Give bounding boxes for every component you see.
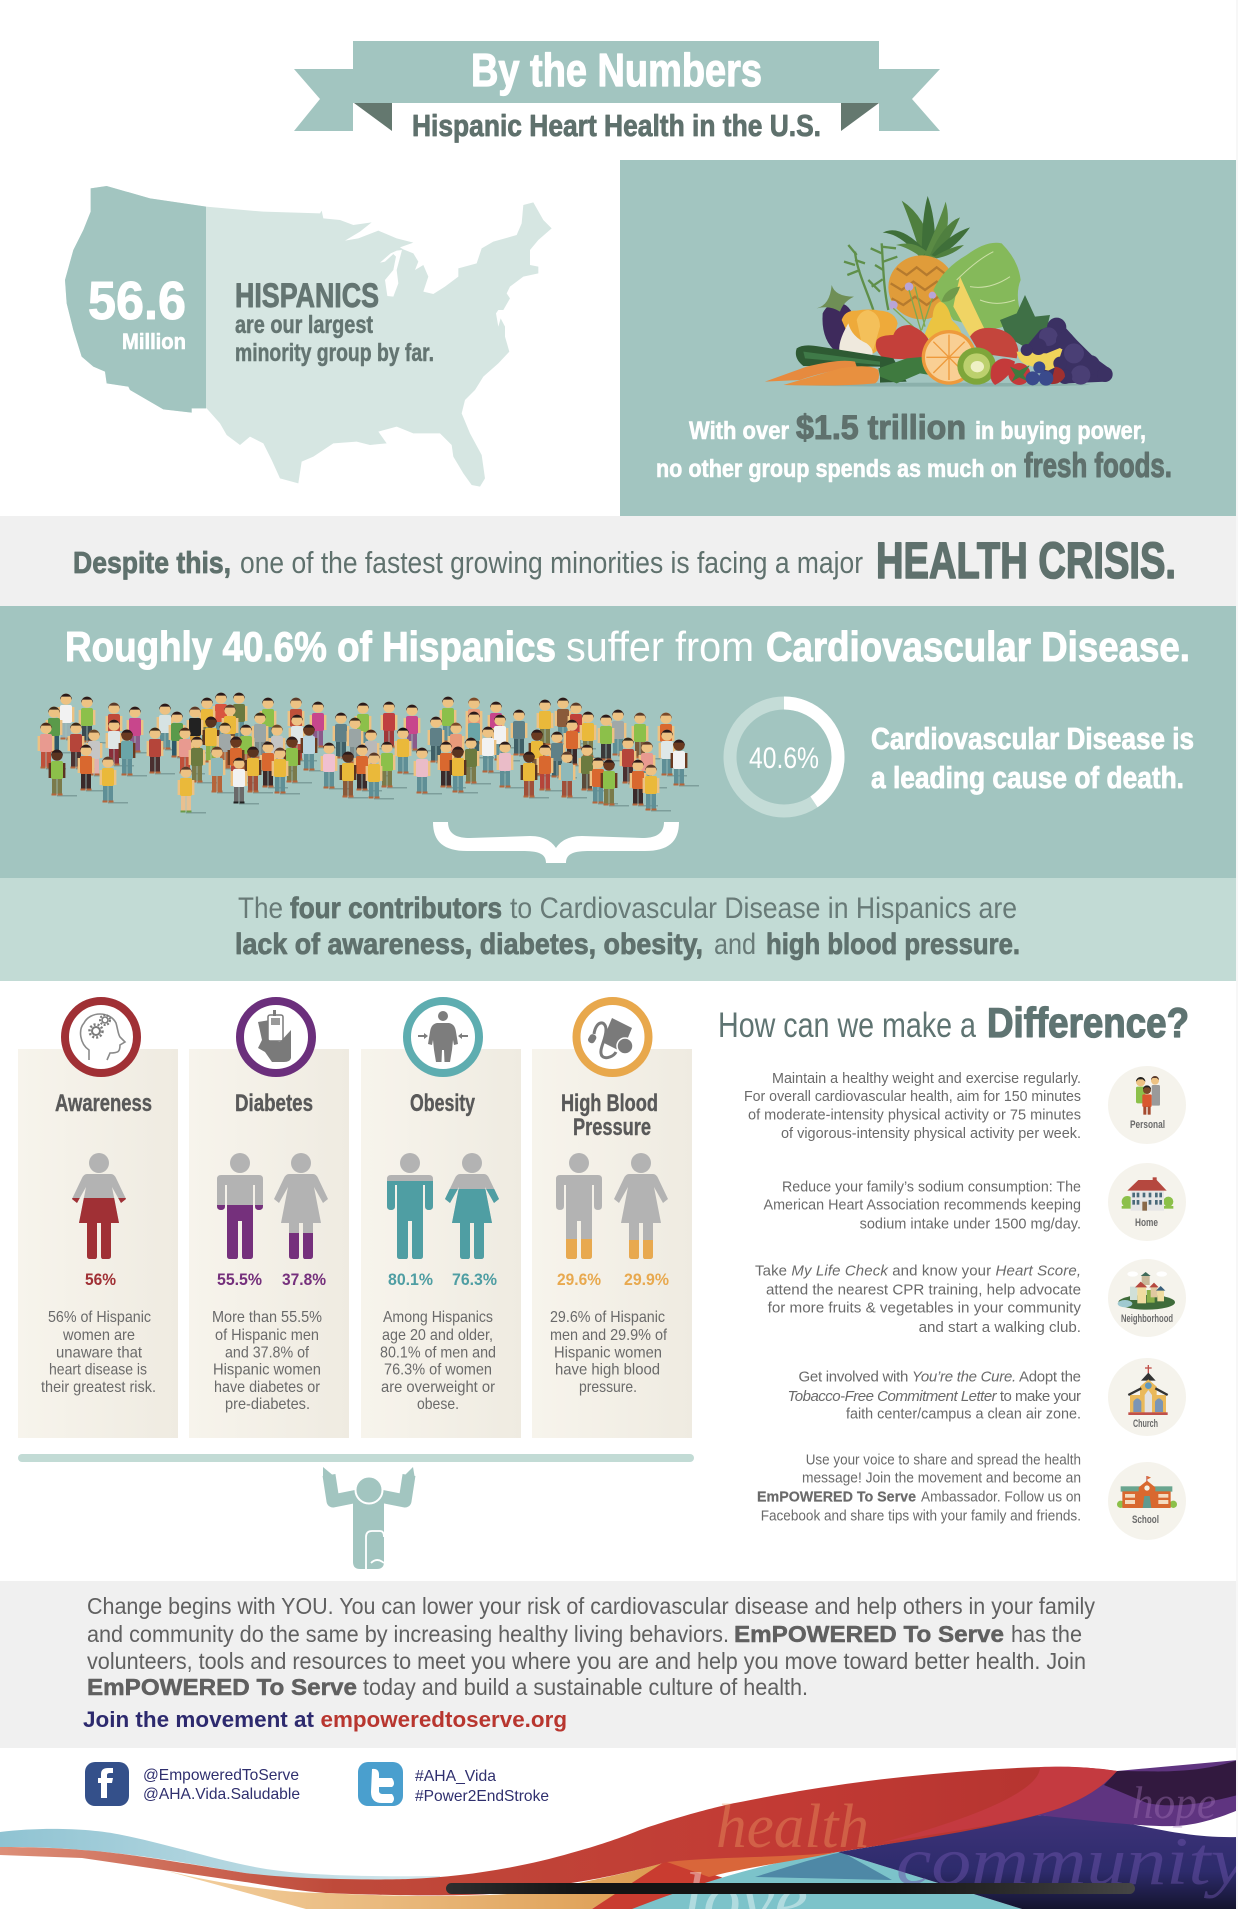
description xyxy=(212,1309,322,1413)
heading: Diabetes xyxy=(235,1090,313,1117)
icon: church xyxy=(1108,1358,1186,1436)
twitter hashtags: #Power2EndStroke xyxy=(415,1788,549,1805)
tip: church: Tobacco-Free Commitment Letter to make your xyxy=(788,1388,1081,1405)
join the movement link xyxy=(83,1707,567,1732)
decorative ribbon with words xyxy=(0,1760,1238,1909)
contributors text: to Cardiovascular Disease in Hispanics are xyxy=(510,892,1017,925)
facebook handles xyxy=(143,1767,300,1803)
health crisis text xyxy=(73,532,1176,589)
icon: home: Home xyxy=(1135,1217,1158,1229)
health crisis text: one of the fastest growing minorities is facing a major xyxy=(240,545,863,580)
heading xyxy=(718,999,1189,1046)
description: 76.3% of women xyxy=(384,1362,492,1378)
description: More than 55.5% xyxy=(212,1309,322,1326)
call to action text: Change begins with YOU. You can lower your risk of cardiovascular disease and help others in your family xyxy=(87,1593,1095,1619)
facebook handles: @AHA.Vida.Saludable xyxy=(143,1786,300,1803)
description: and 37.8% of xyxy=(225,1344,309,1362)
stats: 29.6% xyxy=(557,1270,601,1289)
description: Hispanic women xyxy=(213,1362,321,1378)
heading: Awareness xyxy=(55,1090,152,1117)
health crisis text: Despite this, xyxy=(73,545,231,580)
facebook handles: @EmpoweredToServe xyxy=(143,1767,299,1784)
buying power text: no other group spends as much on xyxy=(656,455,1017,483)
call to action text xyxy=(87,1593,1095,1700)
heading: Roughly 40.6% of Hispanics xyxy=(65,623,556,670)
tip: school: Ambassador. Follow us on xyxy=(921,1488,1081,1506)
description xyxy=(550,1309,667,1396)
icon: hand with glucose meter xyxy=(240,1001,312,1073)
stat: 56.6 million xyxy=(88,271,186,354)
heading: Obesity xyxy=(410,1090,475,1117)
figure: man 29.6% xyxy=(556,1153,602,1259)
icon: school: School xyxy=(1132,1514,1159,1526)
subtitle text: Hispanic Heart Health in the U.S. xyxy=(412,108,821,143)
description: pre-diabetes. xyxy=(225,1396,310,1413)
map shape xyxy=(65,186,552,487)
map caption: are our largest xyxy=(235,311,374,339)
description: men and 29.9% of xyxy=(550,1327,667,1344)
person xyxy=(323,1467,415,1569)
tip: school xyxy=(757,1452,1081,1524)
heading: How can we make a xyxy=(718,1006,976,1045)
icon glyph t xyxy=(371,1769,394,1803)
figure: woman 37.8% xyxy=(274,1153,328,1259)
description: 80.1% of men and xyxy=(380,1344,496,1362)
description: their greatest risk. xyxy=(41,1379,156,1396)
description: of Hispanic men xyxy=(215,1327,319,1344)
call to action text: EmPOWERED To Serve xyxy=(734,1621,1004,1647)
figure carrying the weight bar xyxy=(18,1454,694,1569)
donut chart 40.6%: 40.6% xyxy=(749,742,819,775)
tip: home: Reduce your family’s sodium consumption: The xyxy=(782,1178,1081,1196)
stats: 55.5% xyxy=(217,1270,262,1289)
title text: By the Numbers xyxy=(471,44,762,96)
panel: buying power xyxy=(620,160,1238,516)
heading: Difference? xyxy=(987,999,1189,1046)
call to action text: volunteers, tools and resources to meet you where you are and help you move toward better health. Join xyxy=(87,1648,1086,1674)
description: unaware that xyxy=(56,1344,143,1362)
tip: home xyxy=(764,1178,1081,1232)
tip: neighborhood: attend the nearest CPR training, help advocate xyxy=(766,1282,1081,1298)
figure: woman 56% xyxy=(72,1153,126,1259)
description xyxy=(41,1309,156,1396)
icon: neighborhood: Neighborhood xyxy=(1121,1313,1173,1325)
call to action text: and community do the same by increasing healthy living behaviors. xyxy=(87,1621,729,1647)
icon: neighborhood xyxy=(1108,1259,1186,1337)
tip: home: sodium intake under 1500 mg/day. xyxy=(860,1216,1081,1232)
tip: personal: Maintain a healthy weight and exercise regularly. xyxy=(772,1070,1081,1087)
twitter hashtags xyxy=(415,1768,549,1805)
contributors text: The xyxy=(238,892,283,925)
contributors text: four contributors xyxy=(290,892,502,925)
description: 56% of Hispanic xyxy=(48,1309,151,1326)
tip: home: American Heart Association recommends keeping xyxy=(764,1196,1081,1214)
stats xyxy=(557,1270,669,1289)
buying power text xyxy=(656,409,1172,485)
heading: Pressure xyxy=(573,1114,651,1141)
tip: personal xyxy=(744,1070,1081,1142)
tip: neighborhood: and start a walking club. xyxy=(919,1319,1081,1336)
figure: man 80.1% xyxy=(387,1153,433,1259)
description: Hispanic women xyxy=(554,1344,662,1362)
card: awareness xyxy=(18,1001,178,1438)
tip: church: faith center/campus a clean air zone. xyxy=(846,1406,1081,1422)
brace xyxy=(433,822,679,863)
tip: neighborhood: for more fruits & vegetables in your community xyxy=(768,1300,1081,1316)
icon: fruit and vegetables xyxy=(765,196,1113,387)
description xyxy=(380,1309,496,1413)
heading: suffer from xyxy=(566,623,754,670)
donut chart 40.6% xyxy=(730,703,838,811)
buying power text: in buying power, xyxy=(975,417,1146,445)
description: Among Hispanics xyxy=(383,1309,493,1326)
map caption: minority group by far. xyxy=(235,339,434,367)
icon: blood pressure cuff xyxy=(576,1001,648,1073)
description: are overweight or xyxy=(381,1379,496,1396)
stat: 56.6 million: Million xyxy=(122,329,186,354)
contributors text xyxy=(235,892,1020,961)
tip: neighborhood: Take My Life Check and know your Heart Score, xyxy=(755,1262,1081,1280)
map caption: HISPANICS xyxy=(235,277,379,315)
buying power text: fresh foods. xyxy=(1024,447,1172,485)
tip: school: Facebook and share tips with your family and friends. xyxy=(761,1508,1081,1524)
contributors text: high blood pressure. xyxy=(766,928,1020,961)
figure: woman 29.9% xyxy=(614,1153,668,1259)
call to action text: has the xyxy=(1011,1621,1082,1647)
tip: personal: of vigorous-intensity physical activity per week. xyxy=(781,1125,1081,1142)
tip: neighborhood xyxy=(755,1262,1081,1336)
description: obese. xyxy=(417,1396,459,1413)
scrollbar xyxy=(446,1883,1135,1894)
panel: US map xyxy=(65,186,552,487)
stat: 56.6 million: 56.6 xyxy=(88,271,186,331)
stat: 56% xyxy=(85,1270,116,1289)
tip: school: Use your voice to share and spread the health xyxy=(806,1452,1081,1468)
word: community: community xyxy=(896,1823,1238,1899)
right edge strip xyxy=(1236,0,1238,1909)
panel: health crisis band xyxy=(0,516,1238,606)
description: have high blood xyxy=(555,1362,660,1378)
description: 29.6% of Hispanic xyxy=(550,1309,665,1326)
title banner xyxy=(294,41,940,143)
tip: church: Get involved with You’re the Cure. Adopt the xyxy=(798,1368,1081,1386)
description: heart disease is xyxy=(49,1362,147,1378)
crowd of people xyxy=(38,693,699,814)
icon: personal: Personal xyxy=(1130,1119,1165,1131)
icon: personal xyxy=(1108,1066,1186,1144)
icon glyph f xyxy=(98,1768,113,1798)
join the movement link: empoweredtoserve.org xyxy=(320,1707,567,1732)
icon: head with gears xyxy=(65,1001,137,1073)
panel: call to action xyxy=(0,1581,1238,1748)
social: twitter xyxy=(358,1762,549,1806)
heading xyxy=(65,623,1190,670)
figure: woman 76.3% xyxy=(445,1153,499,1259)
buying power text: With over xyxy=(689,417,789,445)
panel: how can we make a difference xyxy=(718,999,1189,1540)
contributors text: lack of awareness, diabetes, obesity, xyxy=(235,928,703,961)
heading: Cardiovascular Disease. xyxy=(766,623,1190,670)
leading cause text xyxy=(871,721,1194,795)
stats: 80.1% xyxy=(388,1270,433,1289)
icon: home xyxy=(1108,1163,1186,1241)
description: have diabetes or xyxy=(214,1379,321,1396)
stats: 29.9% xyxy=(624,1270,669,1289)
social: facebook xyxy=(85,1762,300,1806)
description: age 20 and older, xyxy=(382,1327,493,1344)
panel: cardiovascular disease xyxy=(0,606,1238,878)
stats: 37.8% xyxy=(282,1270,326,1289)
word: hope: hope xyxy=(1132,1777,1216,1828)
call to action text: EmPOWERED To Serve xyxy=(87,1674,357,1700)
buying power text: $1.5 trillion xyxy=(796,409,966,447)
call to action text: today and build a sustainable culture of health. xyxy=(363,1674,808,1700)
stats xyxy=(217,1270,326,1289)
icon: overweight figure xyxy=(407,1001,479,1073)
card: diabetes xyxy=(189,1001,349,1438)
tip: school: EmPOWERED To Serve xyxy=(757,1488,916,1506)
heading: High Blood xyxy=(561,1090,658,1117)
tip: personal: For overall cardiovascular health, aim for 150 minutes xyxy=(744,1088,1081,1105)
leading cause text: a leading cause of death. xyxy=(871,760,1184,795)
icon: school xyxy=(1108,1462,1186,1540)
tip: church xyxy=(788,1368,1081,1422)
card: obesity xyxy=(361,1001,521,1438)
figure: man 55.5% xyxy=(217,1153,263,1259)
icon: church: Church xyxy=(1133,1418,1158,1430)
description: women are xyxy=(62,1327,135,1344)
contributors text: and xyxy=(714,928,756,961)
map caption xyxy=(235,277,434,367)
stats xyxy=(388,1270,497,1289)
tip: school: message! Join the movement and become an xyxy=(802,1470,1081,1486)
card: high blood pressure xyxy=(532,1001,692,1438)
stats: 76.3% xyxy=(452,1270,497,1289)
description: pressure. xyxy=(579,1379,637,1396)
heading xyxy=(561,1090,658,1141)
join the movement link: Join the movement at xyxy=(83,1707,315,1732)
bar xyxy=(18,1454,694,1462)
tip: personal: of moderate-intensity physical activity or 75 minutes xyxy=(748,1106,1081,1124)
twitter hashtags: #AHA_Vida xyxy=(415,1768,496,1785)
panel: four contributors xyxy=(0,878,1238,981)
word: health: health xyxy=(716,1793,869,1861)
